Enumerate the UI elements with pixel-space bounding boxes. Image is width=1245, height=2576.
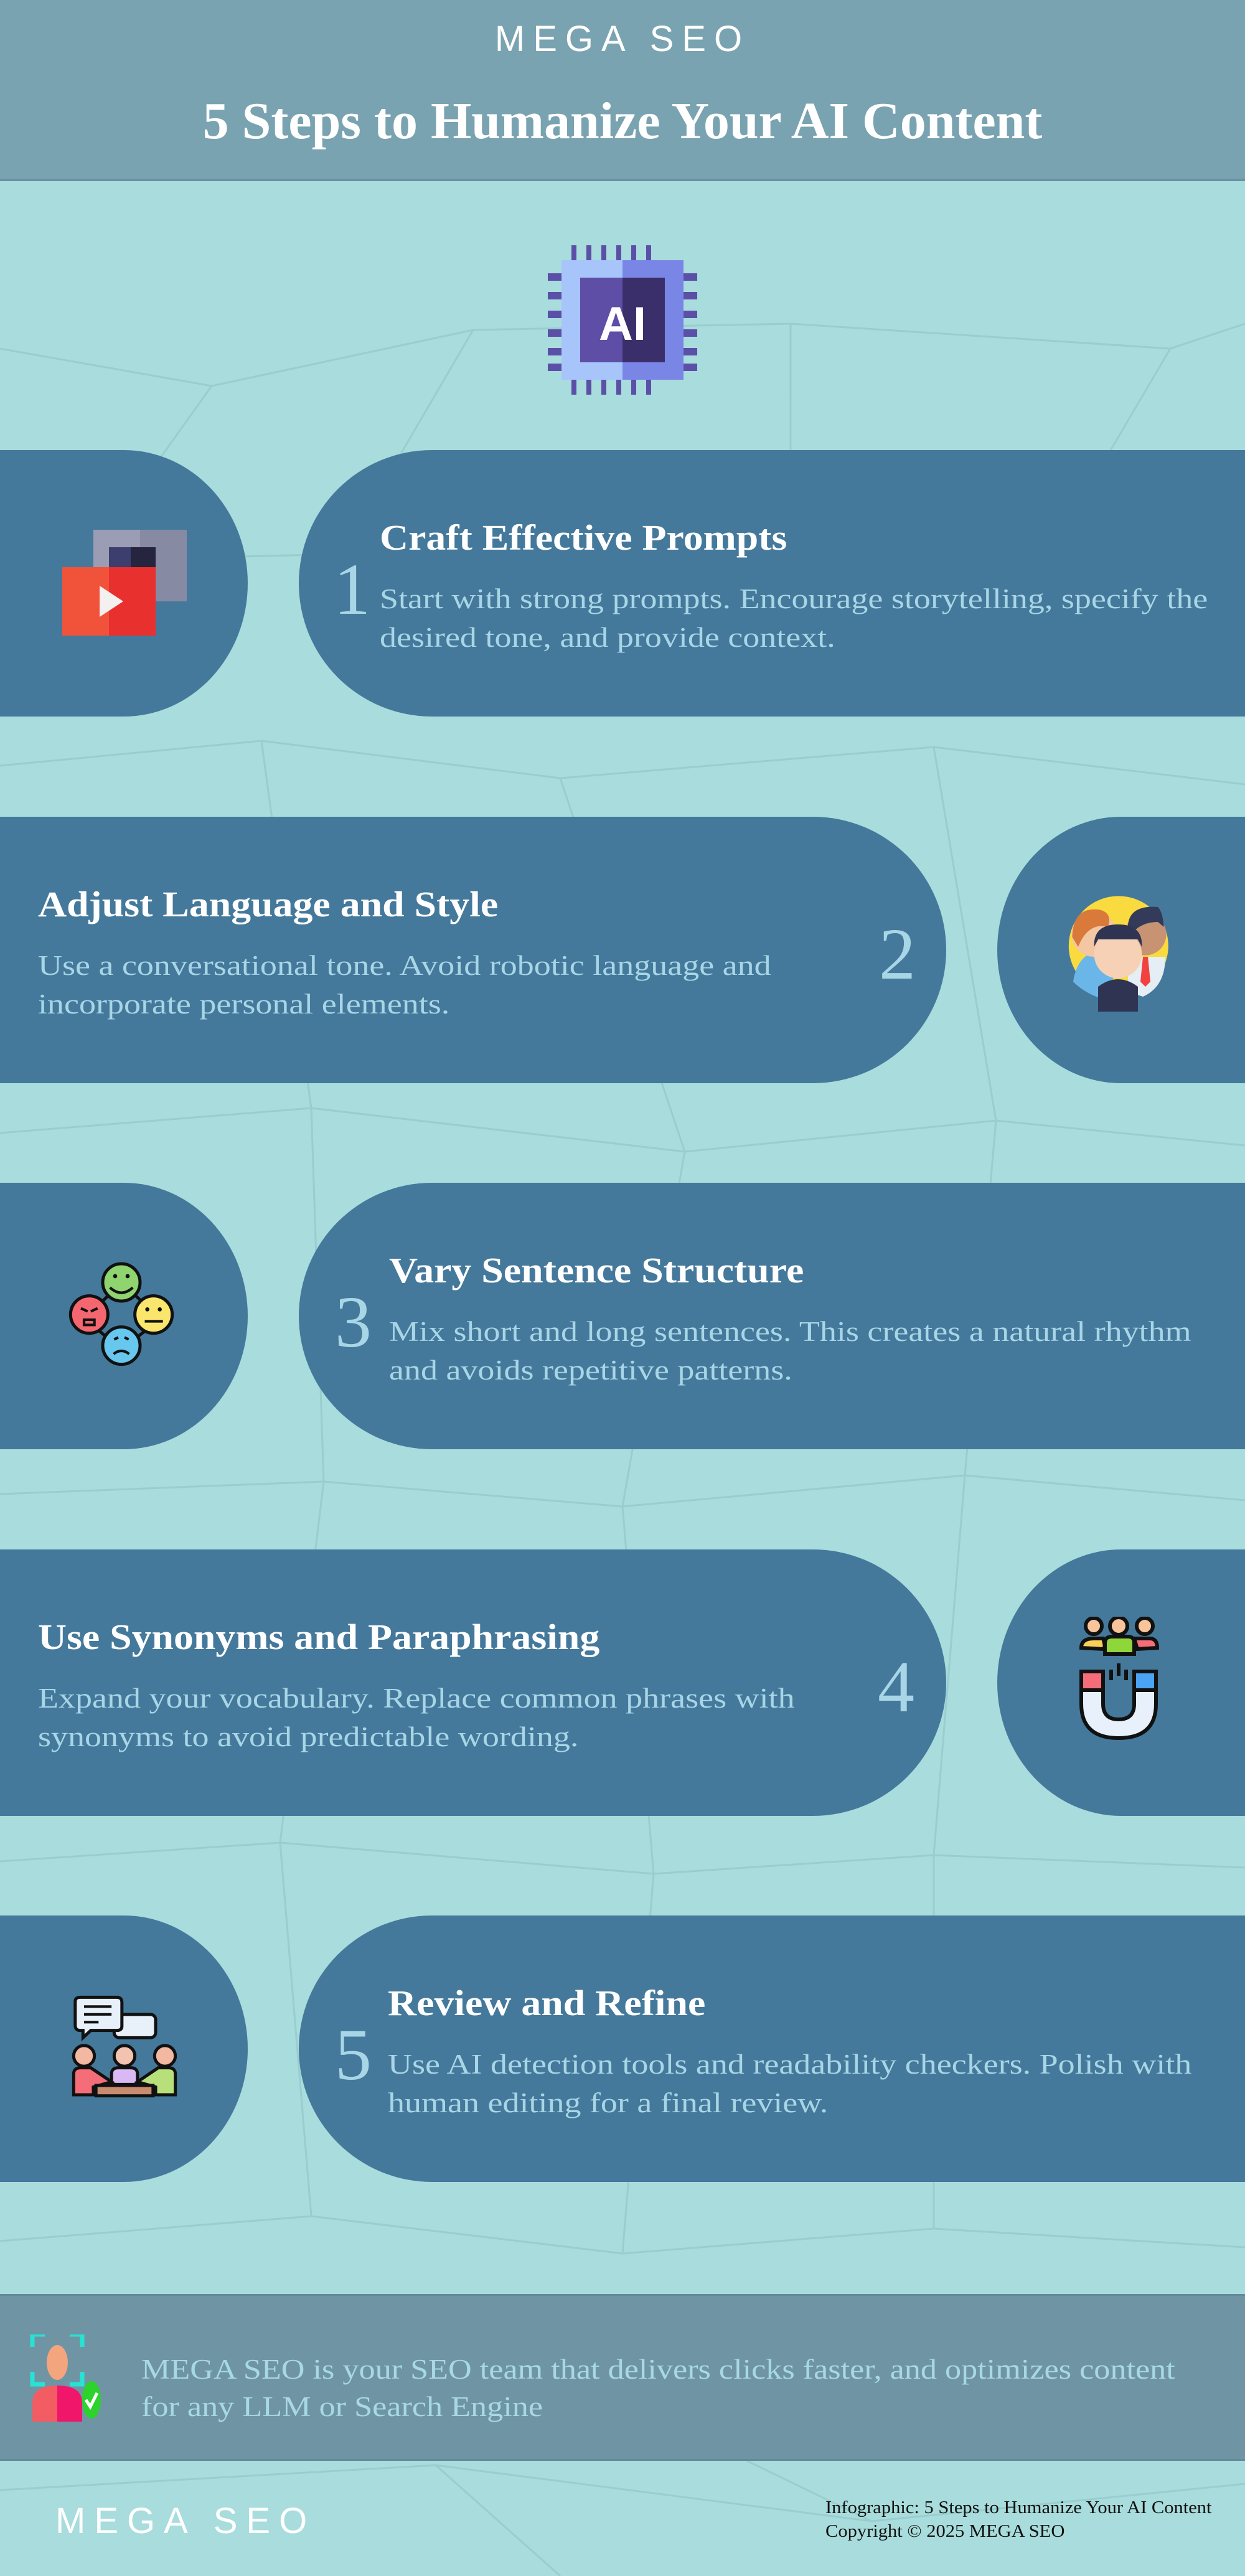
step 2 icon panel: [997, 817, 1245, 1083]
step 5 text panel: [299, 1916, 1245, 2182]
step 3 text panel: [299, 1183, 1245, 1449]
body 3: and avoids repetitive patterns.: [389, 1355, 792, 1386]
icon: AI chip: [548, 245, 697, 395]
step 2: [0, 817, 1245, 1083]
icon: AI chip: AI: [599, 298, 646, 350]
step 4: [0, 1549, 1245, 1816]
footer callout text: MEGA SEO is your SEO team that delivers clicks faster, and optimizes content: [141, 2354, 1175, 2385]
step 5 icon panel: [0, 1916, 248, 2182]
header logo text: MEGA SEO: [495, 19, 750, 59]
step 3: [0, 1183, 1245, 1449]
heading 1: Craft Effective Prompts: [380, 517, 787, 558]
title: 5 Steps to Humanize Your AI Content: [203, 92, 1042, 150]
body 4: [38, 1683, 795, 1752]
heading 4: Use Synonyms and Paraphrasing: [38, 1617, 599, 1657]
step 5: [0, 1916, 1245, 2182]
step 1 icon panel: [0, 450, 248, 717]
step 1 text panel: [299, 450, 1245, 717]
icon: meeting discussion: [72, 1996, 177, 2098]
footer credits: Infographic: 5 Steps to Humanize Your AI Content: [825, 2498, 1212, 2517]
step 4 icon panel: [997, 1549, 1245, 1816]
footer callout text: for any LLM or Search Engine: [141, 2391, 543, 2422]
body 5: Use AI detection tools and readability checkers. Polish with: [388, 2049, 1191, 2080]
heading 5: Review and Refine: [388, 1983, 705, 2023]
icon: magnet attracting people: [1079, 1617, 1159, 1740]
body 1: [380, 583, 1208, 653]
number 2: 2: [879, 913, 916, 995]
body 2: incorporate personal elements.: [38, 989, 449, 1020]
icon: team people: [1068, 896, 1168, 1012]
icon: verified user: [30, 2334, 101, 2422]
body 2: [38, 950, 771, 1020]
body 5: [388, 2049, 1191, 2118]
footer credits: Copyright © 2025 MEGA SEO: [825, 2522, 1064, 2541]
body 2: Use a conversational tone. Avoid robotic language and: [38, 950, 771, 981]
footer callout text: [141, 2354, 1175, 2422]
step 2 text panel: [0, 817, 946, 1083]
icon: video play: [62, 530, 187, 636]
footer logo: MEGA SEO: [55, 2501, 316, 2541]
body 1: Start with strong prompts. Encourage storytelling, specify the: [380, 583, 1208, 614]
body 4: Expand your vocabulary. Replace common phrases with: [38, 1683, 795, 1714]
number 5: 5: [335, 2014, 372, 2095]
number 4: 4: [878, 1646, 914, 1728]
body 3: Mix short and long sentences. This creates a natural rhythm: [389, 1316, 1191, 1347]
header band: [0, 0, 1245, 181]
icon: emotion faces: [68, 1262, 174, 1366]
number 1: 1: [334, 548, 370, 630]
body 3: [389, 1316, 1191, 1386]
step 3 icon panel: [0, 1183, 248, 1449]
number 3: 3: [335, 1281, 372, 1363]
footer callout band: [0, 2294, 1245, 2461]
body 4: synonyms to avoid predictable wording.: [38, 1721, 578, 1752]
footer credits: [825, 2498, 1212, 2541]
heading 3: Vary Sentence Structure: [389, 1250, 804, 1290]
body 1: desired tone, and provide context.: [380, 622, 835, 653]
step 4 text panel: [0, 1549, 946, 1816]
heading 2: Adjust Language and Style: [38, 884, 498, 924]
body 5: human editing for a final review.: [388, 2087, 828, 2118]
step 1: [0, 450, 1245, 717]
